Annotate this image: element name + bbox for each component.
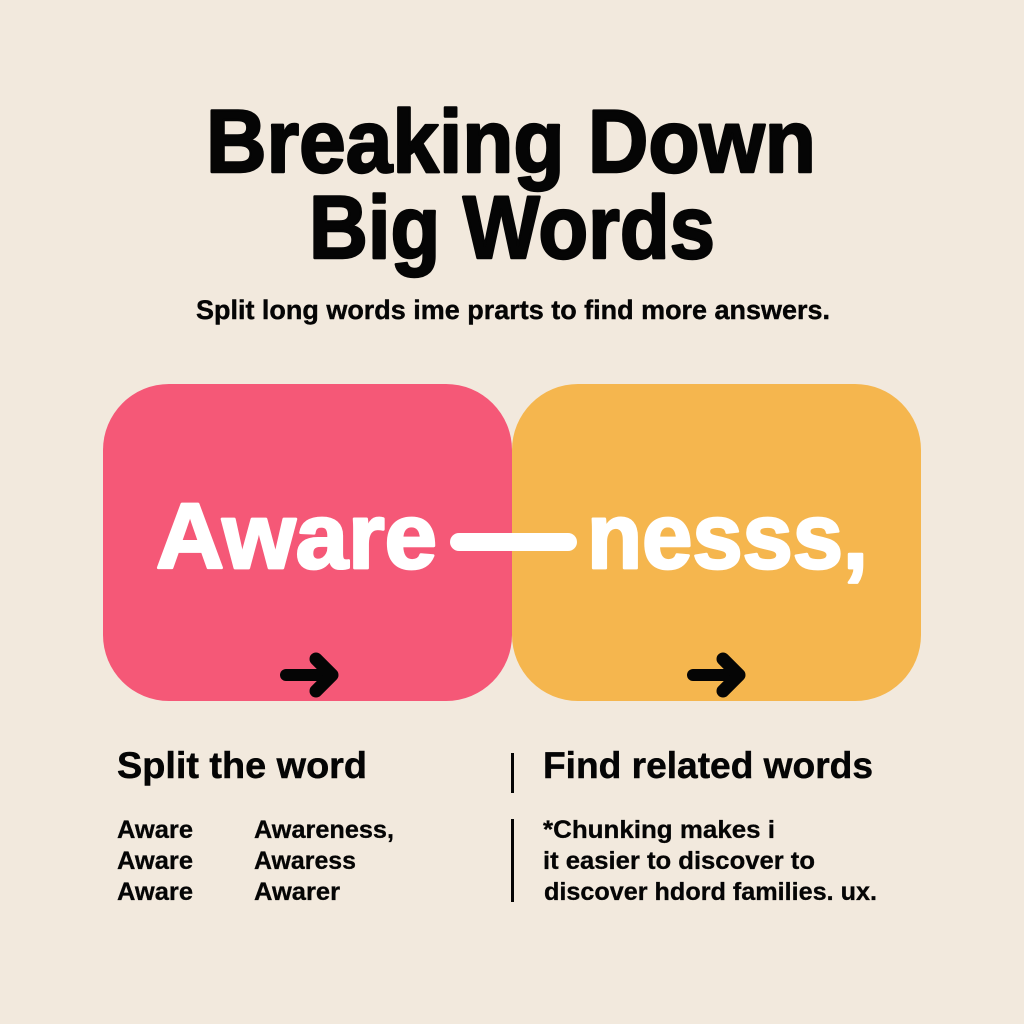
word list: base words: Aware xyxy=(117,878,193,906)
word list: related words: Awaress xyxy=(254,847,356,875)
word: nesss: nesss, xyxy=(587,484,868,588)
text block: chunking note: *Chunking makes i xyxy=(543,816,775,844)
heading: find related words: Find related words xyxy=(543,745,873,786)
text block: chunking note: discover hdord families. ux. xyxy=(544,878,877,906)
icon: orange panel arrow xyxy=(693,659,739,691)
panel: word parts xyxy=(103,384,921,701)
word list: base words: Aware xyxy=(117,816,193,844)
title: Big Words xyxy=(309,177,715,277)
title: Breaking Down xyxy=(206,91,816,191)
word list: related words xyxy=(254,816,394,906)
heading: split the word: Split the word xyxy=(117,745,367,786)
word list: related words: Awareness, xyxy=(254,816,394,844)
text block: chunking note xyxy=(543,816,877,906)
text block: chunking note: it easier to discover to xyxy=(543,847,815,875)
subtitle: Split long words ime prarts to find more answers. xyxy=(196,295,830,325)
word list: base words xyxy=(117,816,193,906)
icon: pink panel arrow xyxy=(286,659,332,691)
word list: base words: Aware xyxy=(117,847,193,875)
panel: orange word part xyxy=(512,384,921,701)
panel: pink word part xyxy=(103,384,512,701)
word list: related words: Awarer xyxy=(254,878,340,906)
word: Aware: Aware xyxy=(156,484,437,588)
title xyxy=(206,91,816,277)
connector between word parts xyxy=(450,533,577,551)
